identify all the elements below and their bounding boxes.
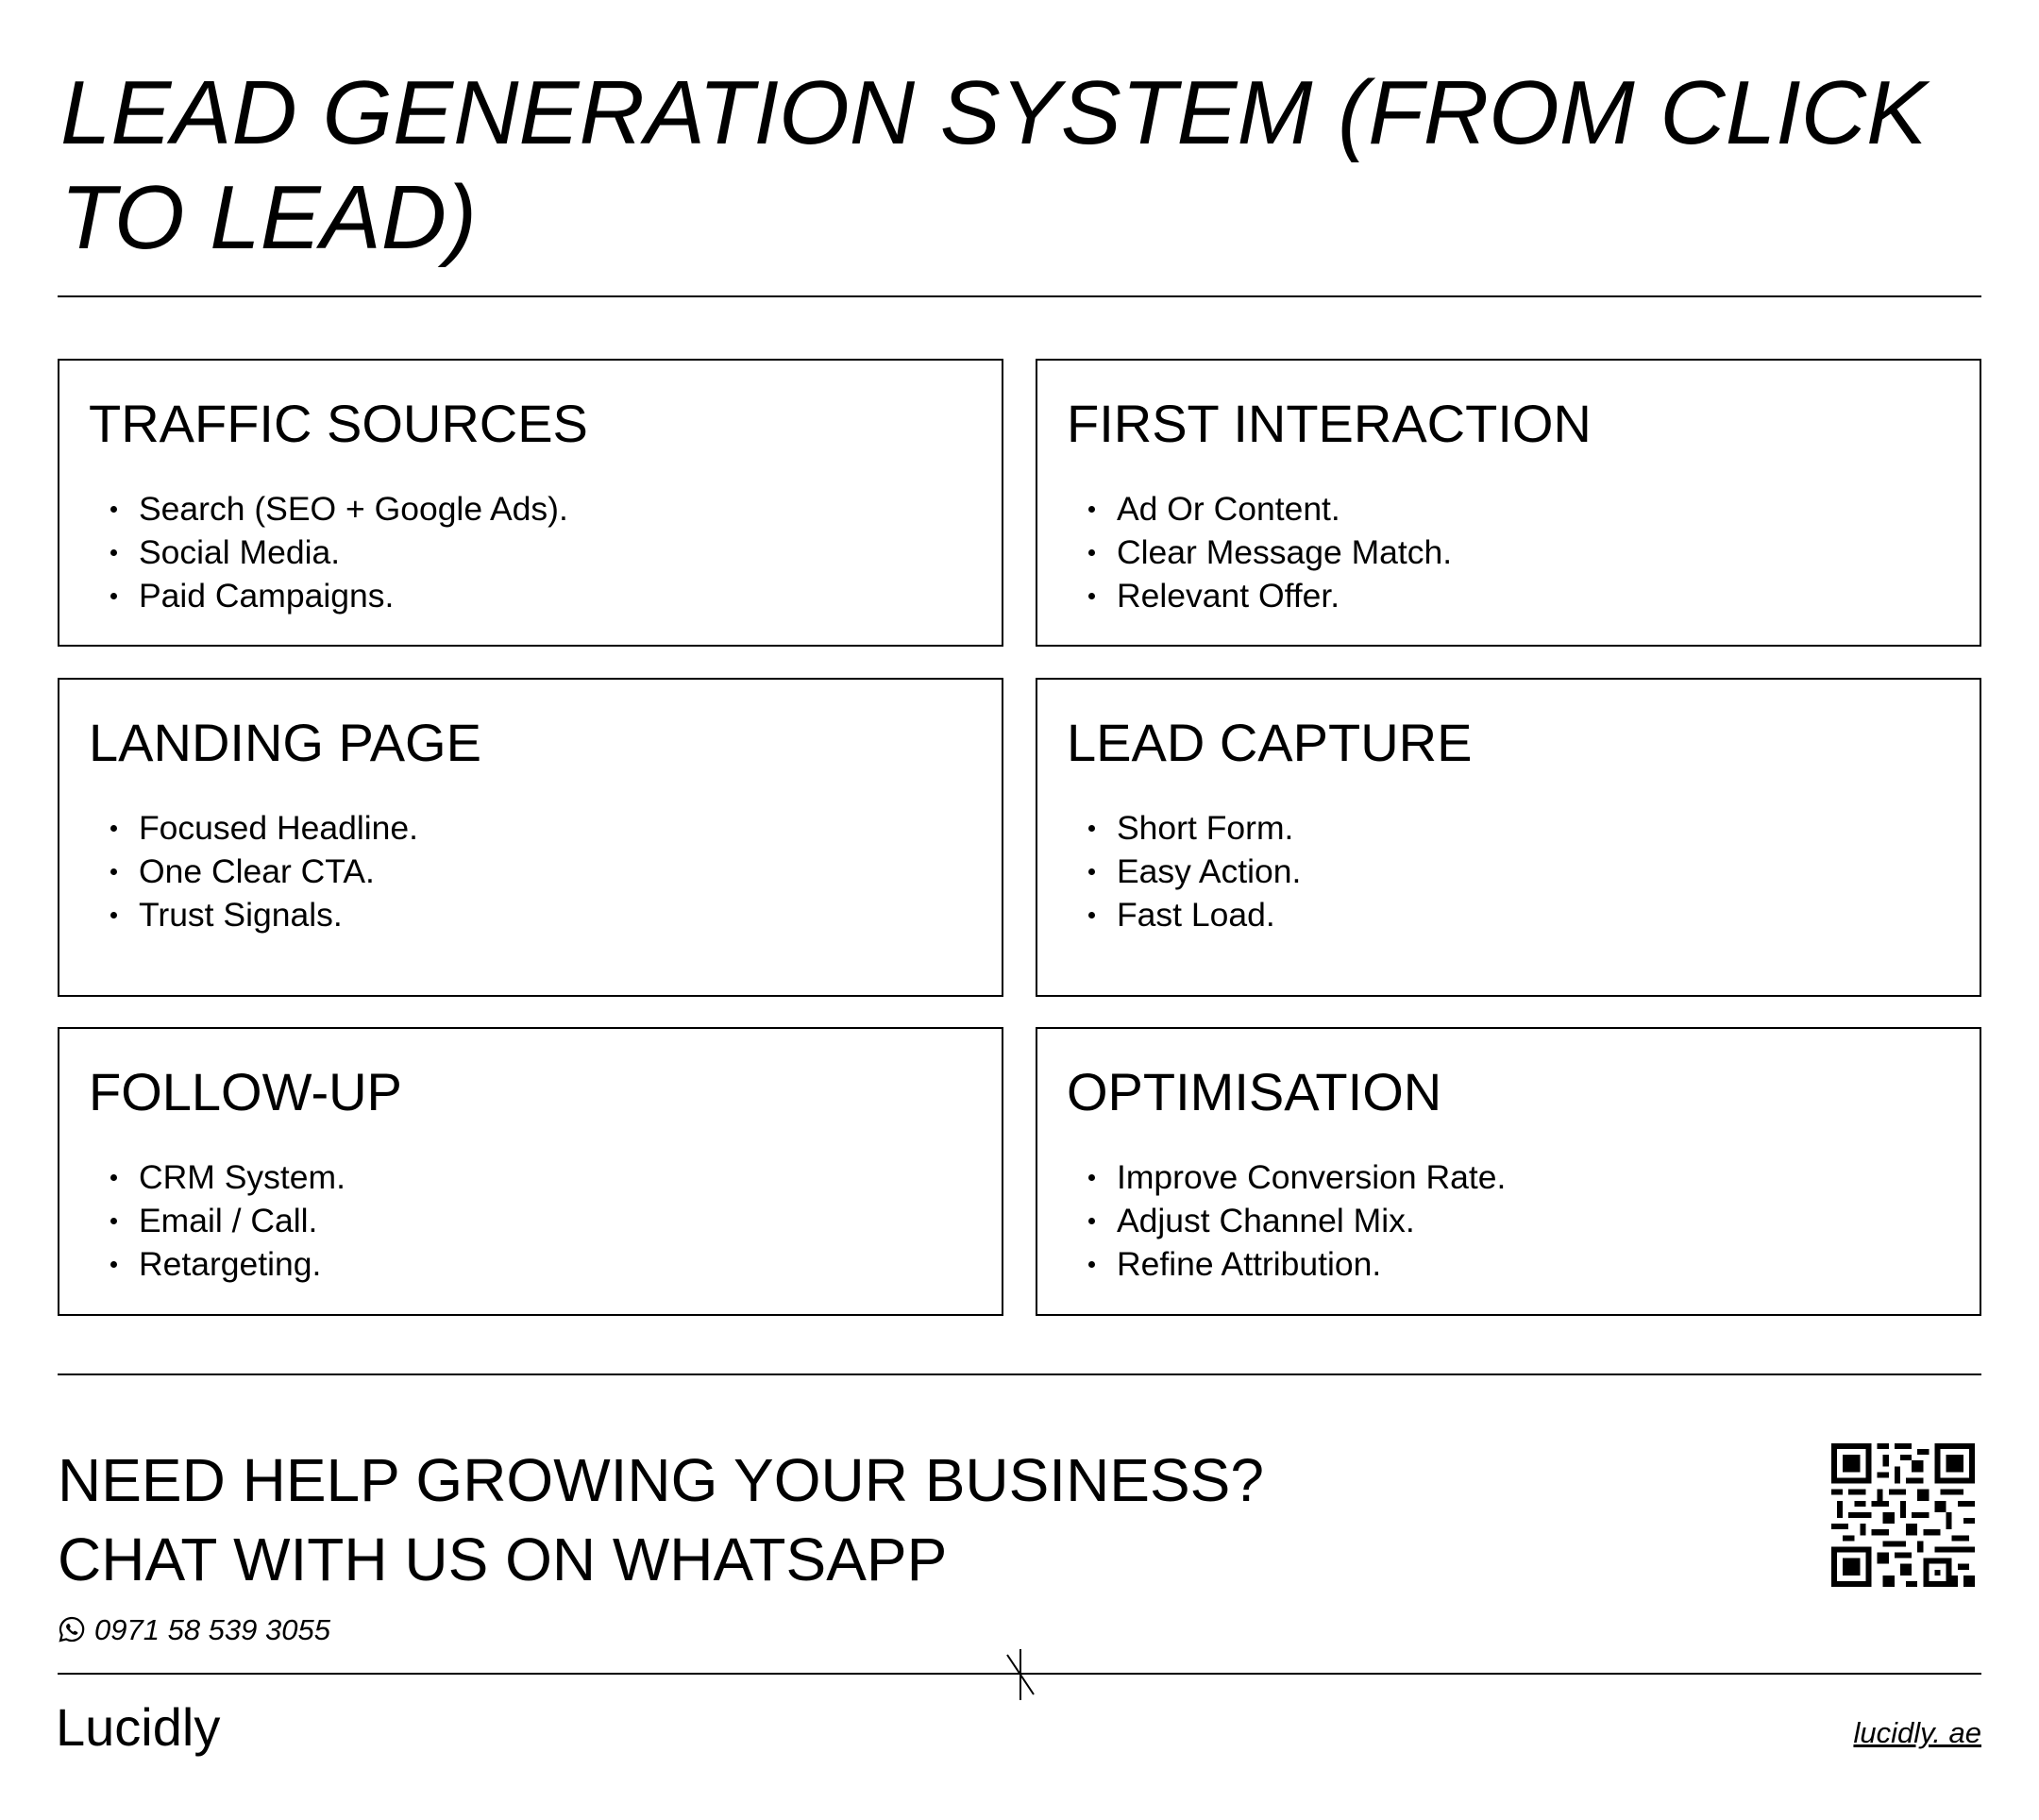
icon: whatsapp: [59, 1616, 85, 1643]
list: traffic sources: Search (SEO + Google Ads).: [139, 490, 568, 528]
list: landing page: Focused Headline.: [139, 809, 418, 847]
heading: optimisation: OPTIMISATION: [1067, 1062, 1441, 1121]
list: follow-up: Retargeting.: [139, 1245, 321, 1283]
list: traffic sources: Social Media.: [139, 533, 340, 571]
list: follow-up: Email / Call.: [139, 1202, 317, 1239]
heading: first interaction: FIRST INTERACTION: [1067, 394, 1592, 453]
logo: Lucidly: Lucidly: [56, 1697, 220, 1757]
title: [60, 62, 1930, 268]
list: landing page: Trust Signals.: [139, 896, 343, 934]
panel: traffic sources: [58, 359, 1003, 647]
list: landing page: [110, 809, 418, 934]
list: follow-up: [110, 1158, 345, 1283]
list: follow-up: CRM System.: [139, 1158, 345, 1196]
panel: first interaction: [1036, 359, 1981, 647]
title: TO LEAD): [60, 167, 477, 268]
panel: follow-up: [58, 1027, 1003, 1316]
panel: landing page: [58, 678, 1003, 997]
panel: optimisation: [1036, 1027, 1981, 1316]
list: landing page: One Clear CTA.: [139, 852, 375, 890]
website link: lucidly. ae: [1853, 1716, 1981, 1749]
list: lead capture: [1088, 809, 1301, 934]
list: lead capture: Short Form.: [1117, 809, 1293, 847]
qr code: [1831, 1443, 1975, 1587]
list: optimisation: Improve Conversion Rate.: [1117, 1158, 1506, 1196]
list: traffic sources: [110, 490, 568, 615]
list: lead capture: Fast Load.: [1117, 896, 1275, 934]
heading: landing page: LANDING PAGE: [89, 713, 481, 772]
list: optimisation: Adjust Channel Mix.: [1117, 1202, 1415, 1239]
call to action: [58, 1446, 1264, 1593]
list: lead capture: Easy Action.: [1117, 852, 1301, 890]
panel: lead capture: [1036, 678, 1981, 997]
title: LEAD GENERATION SYSTEM (FROM CLICK: [60, 62, 1927, 163]
list: first interaction: Ad Or Content.: [1117, 490, 1340, 528]
list: first interaction: [1088, 490, 1452, 615]
heading: traffic sources: TRAFFIC SOURCES: [89, 394, 588, 453]
list: traffic sources: Paid Campaigns.: [139, 577, 394, 615]
heading: follow-up: FOLLOW-UP: [89, 1062, 402, 1121]
icon: star mark: [1006, 1649, 1035, 1700]
list: optimisation: [1088, 1158, 1506, 1283]
list: optimisation: Refine Attribution.: [1117, 1245, 1381, 1283]
phone with whatsapp icon: 0971 58 539 3055: [94, 1613, 330, 1646]
call to action: CHAT WITH US ON WHATSAPP: [58, 1525, 947, 1593]
list: first interaction: Clear Message Match.: [1117, 533, 1452, 571]
heading: lead capture: LEAD CAPTURE: [1067, 713, 1472, 772]
call to action: NEED HELP GROWING YOUR BUSINESS?: [58, 1446, 1264, 1514]
list: first interaction: Relevant Offer.: [1117, 577, 1340, 615]
